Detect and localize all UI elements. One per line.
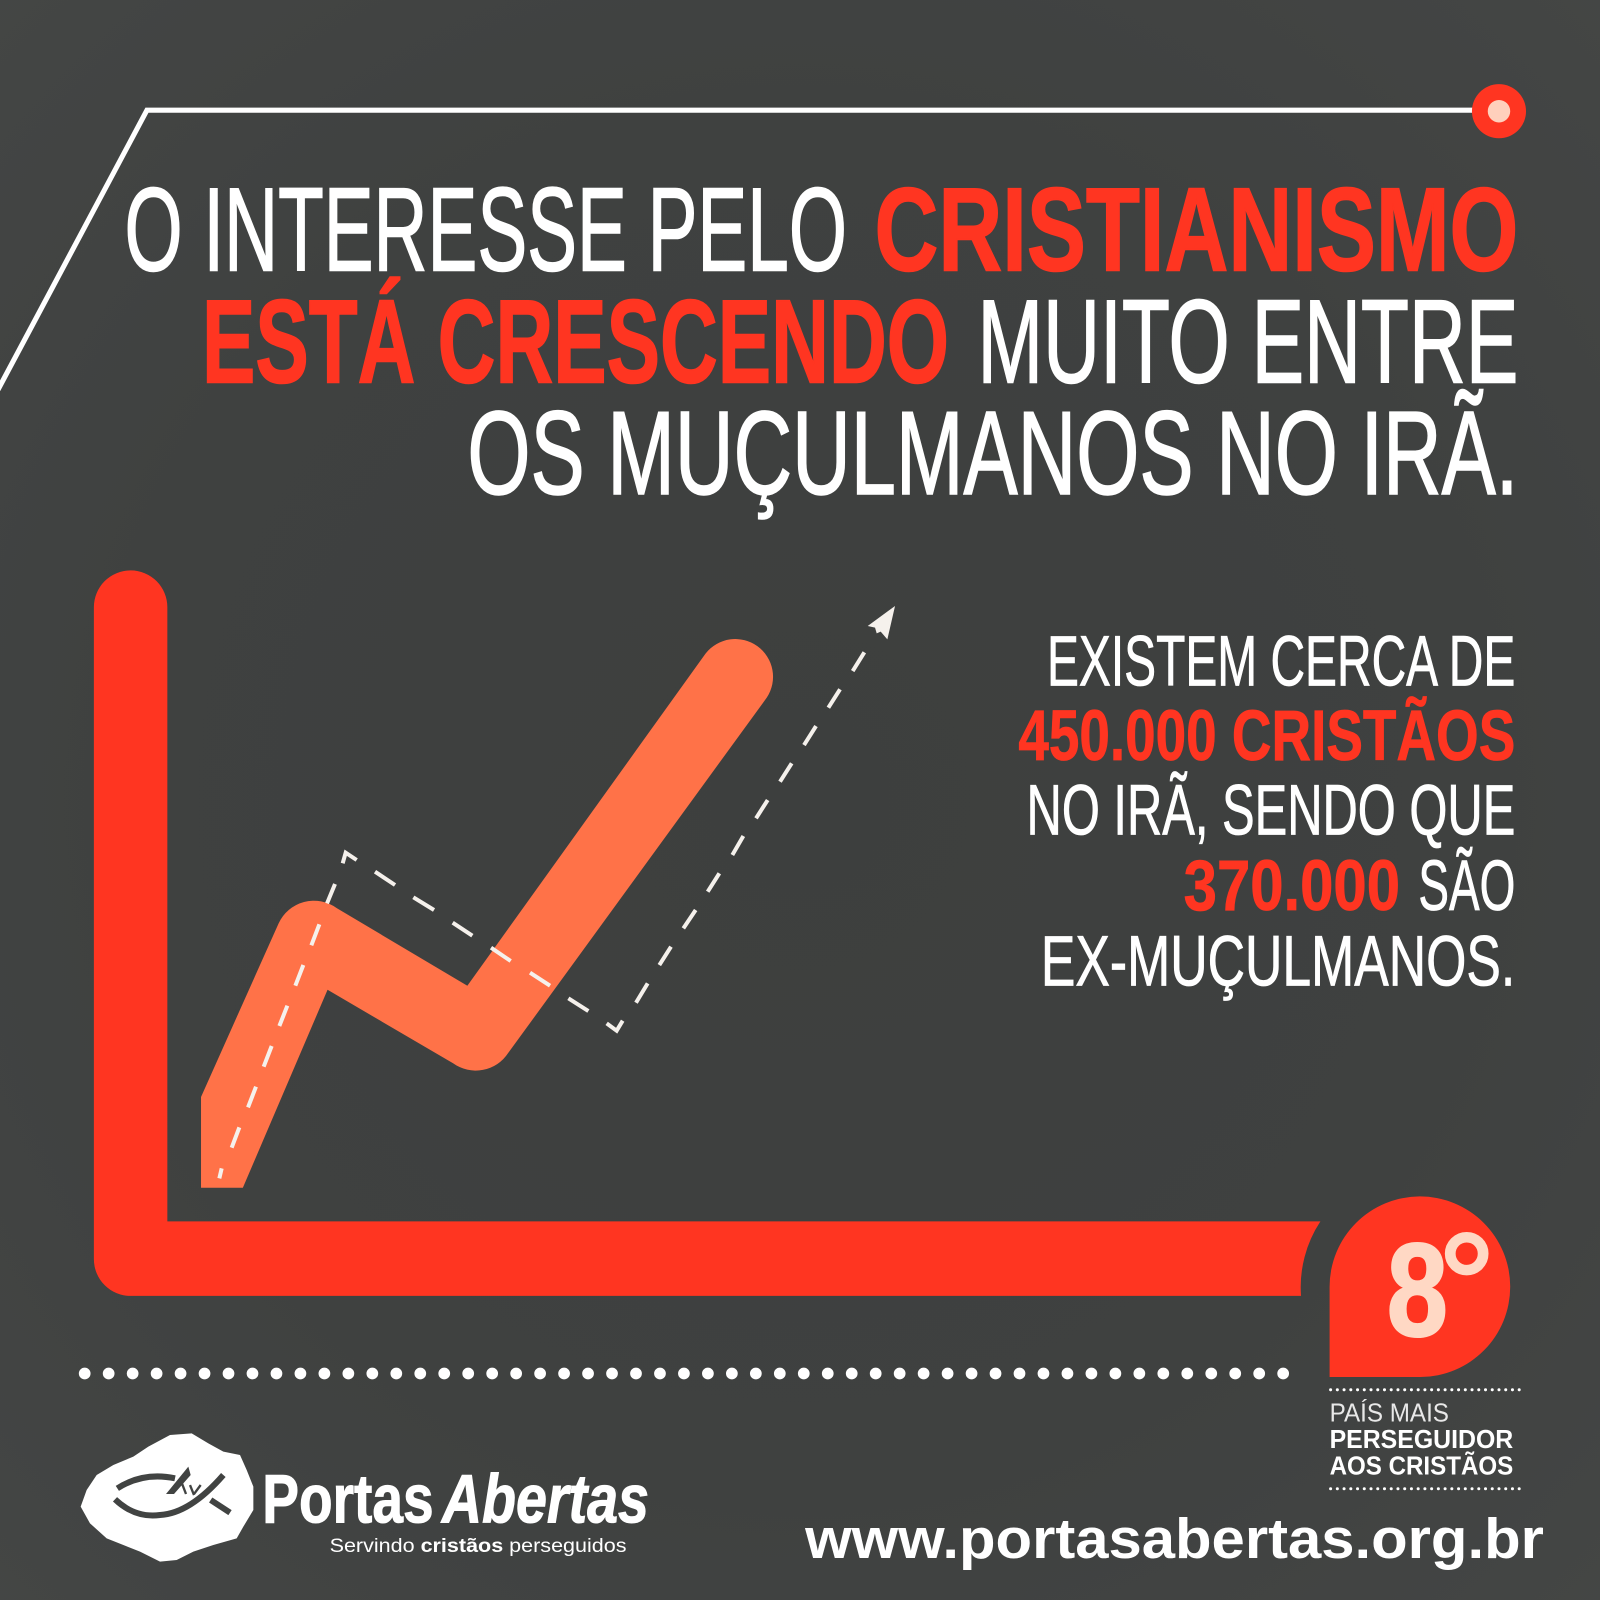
dotted separator — [85, 1368, 1285, 1379]
title line 2: ESTÁ CRESCENDO — [202, 277, 949, 409]
logo wordmark: Abertas — [440, 1461, 649, 1537]
stat line 4: SÃO — [1418, 846, 1515, 926]
logo wordmark: Portas — [262, 1461, 434, 1537]
rank badge: 8 — [1387, 1217, 1448, 1365]
logo icon: stone with fish — [81, 1433, 253, 1562]
logo: Portas Abertas — [81, 1433, 649, 1562]
website url: www.portasabertas.org.br — [804, 1507, 1544, 1570]
rank caption: PERSEGUIDOR — [1330, 1426, 1513, 1454]
rank badge: ° — [1438, 1204, 1496, 1366]
title line 1: O INTERESSE PELO — [124, 164, 847, 296]
decorative header line with end marker — [0, 84, 1526, 390]
red chart axes — [94, 570, 1320, 1296]
title — [124, 164, 1518, 520]
statistics text block — [1018, 622, 1515, 1002]
stat line 4: 370.000 — [1184, 846, 1400, 926]
logo wordmark — [262, 1461, 649, 1537]
logo tagline: Servindo cristãos perseguidos — [330, 1535, 627, 1557]
rank badge — [1330, 1196, 1510, 1377]
orange growth line — [201, 639, 773, 1188]
rank caption — [1330, 1390, 1520, 1489]
rank caption: PAÍS MAIS — [1330, 1398, 1449, 1427]
dashed projection arrow — [219, 606, 895, 1178]
rank caption: AOS CRISTÃOS — [1330, 1450, 1513, 1480]
